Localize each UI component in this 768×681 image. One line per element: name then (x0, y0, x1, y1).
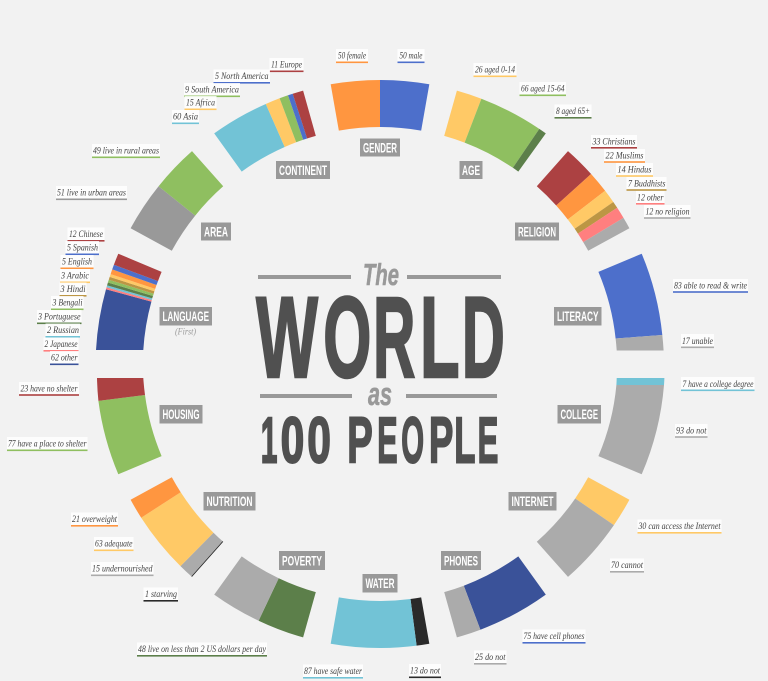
data label: 1 starving: 1 starving (145, 589, 177, 599)
data label: 15 undernourished: 15 undernourished (92, 564, 153, 574)
data label: 75 have cell phones: 75 have cell phones (524, 631, 585, 641)
category label: college: COLLEGE (560, 406, 598, 422)
data label: 21 overweight: 21 overweight (72, 514, 117, 524)
category label: religion: RELIGION (518, 224, 556, 240)
data label: 63 adequate (94, 537, 134, 551)
category label: gender: GENDER (363, 140, 397, 156)
data label: 12 Chinese: 12 Chinese (69, 229, 103, 239)
data label: 70 cannot (610, 558, 644, 573)
category label: literacy: LITERACY (557, 308, 599, 324)
category label: phones (441, 551, 481, 570)
data label: 1 starving (144, 588, 178, 602)
category label: gender (360, 138, 400, 156)
data label: 7 have a college degree (681, 377, 754, 391)
category label: language (160, 307, 212, 326)
ring segment group: religion (537, 151, 629, 251)
data label: 62 other (50, 351, 78, 365)
data label: 66 aged 15-64: 66 aged 15-64 (521, 84, 565, 94)
data label: 2 Japanese (44, 338, 78, 352)
data label: 60 Asia: 60 Asia (173, 112, 198, 122)
data label: 7 Buddhists: 7 Buddhists (628, 178, 666, 188)
title: The World as 100 People: E (377, 403, 398, 476)
category label: college (558, 405, 601, 424)
data label: 12 other: 12 other (637, 192, 664, 202)
category label: continent (276, 161, 330, 179)
data label: 3 Hindi (60, 282, 86, 297)
data label: 48 live on less than 2 US dollars per day (137, 642, 267, 657)
category label: area: AREA (204, 224, 228, 240)
data label: 49 live in rural areas: 49 live in rural areas (93, 146, 159, 156)
data label: 5 English (60, 255, 94, 269)
data label: 23 have no shelter: 23 have no shelter (20, 384, 78, 394)
category label: poverty: POVERTY (282, 552, 322, 568)
data label: 3 Bengali: 3 Bengali (52, 298, 83, 308)
data label: 50 female (336, 49, 368, 63)
ring segment group: age (444, 91, 546, 172)
ring segment group: housing (97, 378, 162, 474)
data label: 14 Hindus (616, 163, 653, 177)
data label: 5 North America (214, 70, 270, 84)
data label: 51 live in urban areas (56, 186, 127, 200)
title: The World as 100 People: L (454, 403, 476, 476)
data label: 3 Portuguese: 3 Portuguese (37, 312, 80, 322)
data label: 50 male (398, 49, 424, 63)
data label: 93 do not (675, 424, 708, 438)
data label: 17 unable: 17 unable (682, 336, 713, 346)
data label: 3 Arabic: 3 Arabic (60, 270, 89, 280)
data label: 83 able to read and write: 83 able to read & write (674, 280, 747, 290)
data label: 22 Muslims: 22 Muslims (606, 150, 644, 160)
data label: 21 overweight (71, 512, 118, 527)
data label: 51 live in urban areas: 51 live in urban areas (57, 188, 126, 198)
data label: 9 South America (184, 83, 240, 97)
data label: 2 Russian (46, 324, 80, 338)
title: The World as 100 People: R (373, 274, 415, 402)
data label: 3 Portuguese (37, 310, 82, 324)
title: The World as 100 People: D (462, 274, 505, 402)
category label: nutrition (204, 492, 256, 510)
data label: 60 Asia (172, 110, 199, 124)
title: The World as 100 People: P (347, 403, 373, 476)
data label: 70 cannot: 70 cannot (611, 560, 643, 570)
category label: area (201, 222, 231, 240)
category label: housing: HOUSING (162, 406, 200, 422)
data label: 15 Africa (184, 96, 216, 110)
data label: 13 do not (409, 664, 441, 678)
data label: 5 English: 5 English (62, 256, 92, 266)
category label: phones: PHONES (444, 552, 478, 568)
data label: 5 North America: 5 North America (215, 71, 269, 81)
title: The World as 100 People: 1 (261, 403, 277, 476)
category label: nutrition: NUTRITION (206, 493, 252, 509)
data label: 77 have a place to shelter (7, 437, 88, 451)
title: The World as 100 People: P (429, 403, 453, 476)
data label: 49 live in rural areas (92, 144, 160, 158)
category label: literacy (554, 307, 602, 326)
data label: 15 Africa: 15 Africa (186, 98, 215, 108)
category label: religion (515, 222, 559, 240)
data label: 63 adequate: 63 adequate (95, 538, 132, 548)
data label: 2 Russian: 2 Russian (47, 325, 79, 335)
data label: 15 undernourished (91, 562, 154, 576)
category label: language: LANGUAGE (162, 308, 209, 324)
title: The World as 100 People: as (368, 376, 392, 412)
category label: internet (508, 492, 556, 510)
data label: 50 male: 50 male (400, 50, 422, 60)
data label: 3 Hindi: 3 Hindi (60, 284, 86, 294)
data label: 33 Christians: 33 Christians (592, 136, 636, 146)
data label: 12 no religion: 12 no religion (646, 206, 690, 216)
data label: 87 have safe water (303, 664, 363, 679)
data label: 77 have a place to shelter: 77 have a place to shelter (8, 438, 87, 448)
data label: 26 aged 0-14: 26 aged 0-14 (475, 64, 515, 74)
data label: 12 no religion (644, 205, 690, 219)
category label: age: AGE (462, 162, 480, 178)
title: The World as 100 People: 0 (307, 403, 331, 476)
data label: 5 Spanish: 5 Spanish (67, 242, 98, 252)
ring segment group: language (96, 254, 162, 350)
data label: 17 unable (681, 334, 714, 348)
data label: 83 able to read and write (673, 279, 748, 293)
data label: 3 Bengali (51, 296, 84, 310)
data label: 75 have cell phones (522, 630, 586, 644)
data label: 25 do not (474, 650, 506, 665)
data label: 30 can access the Internet: 30 can access the Internet (638, 521, 721, 531)
data label: 23 have no shelter (19, 382, 79, 396)
title: The World as 100 People: The (363, 257, 399, 292)
ring segment group: literacy (598, 254, 664, 350)
data label: 12 Chinese (68, 228, 104, 242)
data label: 33 Christians (591, 135, 637, 149)
data label: 26 aged 0-14 (474, 63, 516, 77)
category label: housing (160, 405, 202, 424)
data label: 5 Spanish (66, 241, 99, 255)
title: The World as 100 People: O (323, 274, 371, 402)
title: The World as 100 People: 0 (281, 403, 304, 476)
ring segment group: continent (214, 91, 316, 172)
ring segment group: college (598, 378, 664, 474)
ring segment group: poverty (214, 556, 316, 637)
title: The World as 100 People: W (256, 274, 318, 402)
category label: internet: INTERNET (512, 493, 554, 509)
data label: 11 Europe (270, 58, 304, 72)
data label: 7 Buddhists (626, 177, 666, 191)
data label: 25 do not: 25 do not (475, 652, 506, 662)
data label: 8 aged 65+ (554, 104, 592, 119)
data label: 12 other (636, 191, 664, 205)
data label: 62 other: 62 other (51, 352, 78, 362)
category label: age (460, 161, 482, 179)
data label: 9 South America: 9 South America (185, 84, 239, 94)
title: The World as 100 People: E (478, 403, 498, 476)
data label: 14 Hindus: 14 Hindus (618, 164, 652, 174)
ring segment group: nutrition (131, 477, 223, 577)
data label: 13 do not: 13 do not (410, 666, 440, 676)
data label: 30 can access the Internet (638, 520, 722, 534)
category label: water (362, 574, 398, 592)
title: The World as 100 People: L (420, 274, 460, 402)
data label: 8 aged 65+: 8 aged 65+ (556, 106, 590, 116)
ring segment group: internet (537, 477, 629, 577)
note: first language: (First) (175, 326, 196, 336)
ring segment group: phones (444, 556, 546, 637)
data label: 93 do not: 93 do not (676, 426, 707, 436)
category label: water: WATER (366, 575, 394, 591)
data label: 48 live on less than 2 US dollars per day: 48 live on less than 2 US dollars per day (138, 644, 266, 654)
data label: 3 Arabic (60, 269, 90, 283)
category label: poverty (279, 551, 325, 570)
category label: continent: CONTINENT (279, 162, 327, 178)
data label: 11 Europe: 11 Europe (271, 60, 302, 70)
data label: 66 aged 15-64 (520, 82, 566, 96)
title: The World as 100 People: O (401, 403, 424, 476)
data label: 7 have a college degree: 7 have a college degree (682, 379, 754, 389)
data label: 87 have safe water: 87 have safe water (304, 666, 362, 676)
ring segment group: water (331, 597, 429, 648)
data label: 2 Japanese: 2 Japanese (44, 339, 78, 349)
data label: 50 female: 50 female (338, 50, 366, 60)
ring segment group: area (131, 151, 223, 251)
ring segment group: gender (331, 80, 429, 131)
data label: 22 Muslims (604, 149, 645, 163)
title: The World as 100 People (256, 257, 505, 476)
